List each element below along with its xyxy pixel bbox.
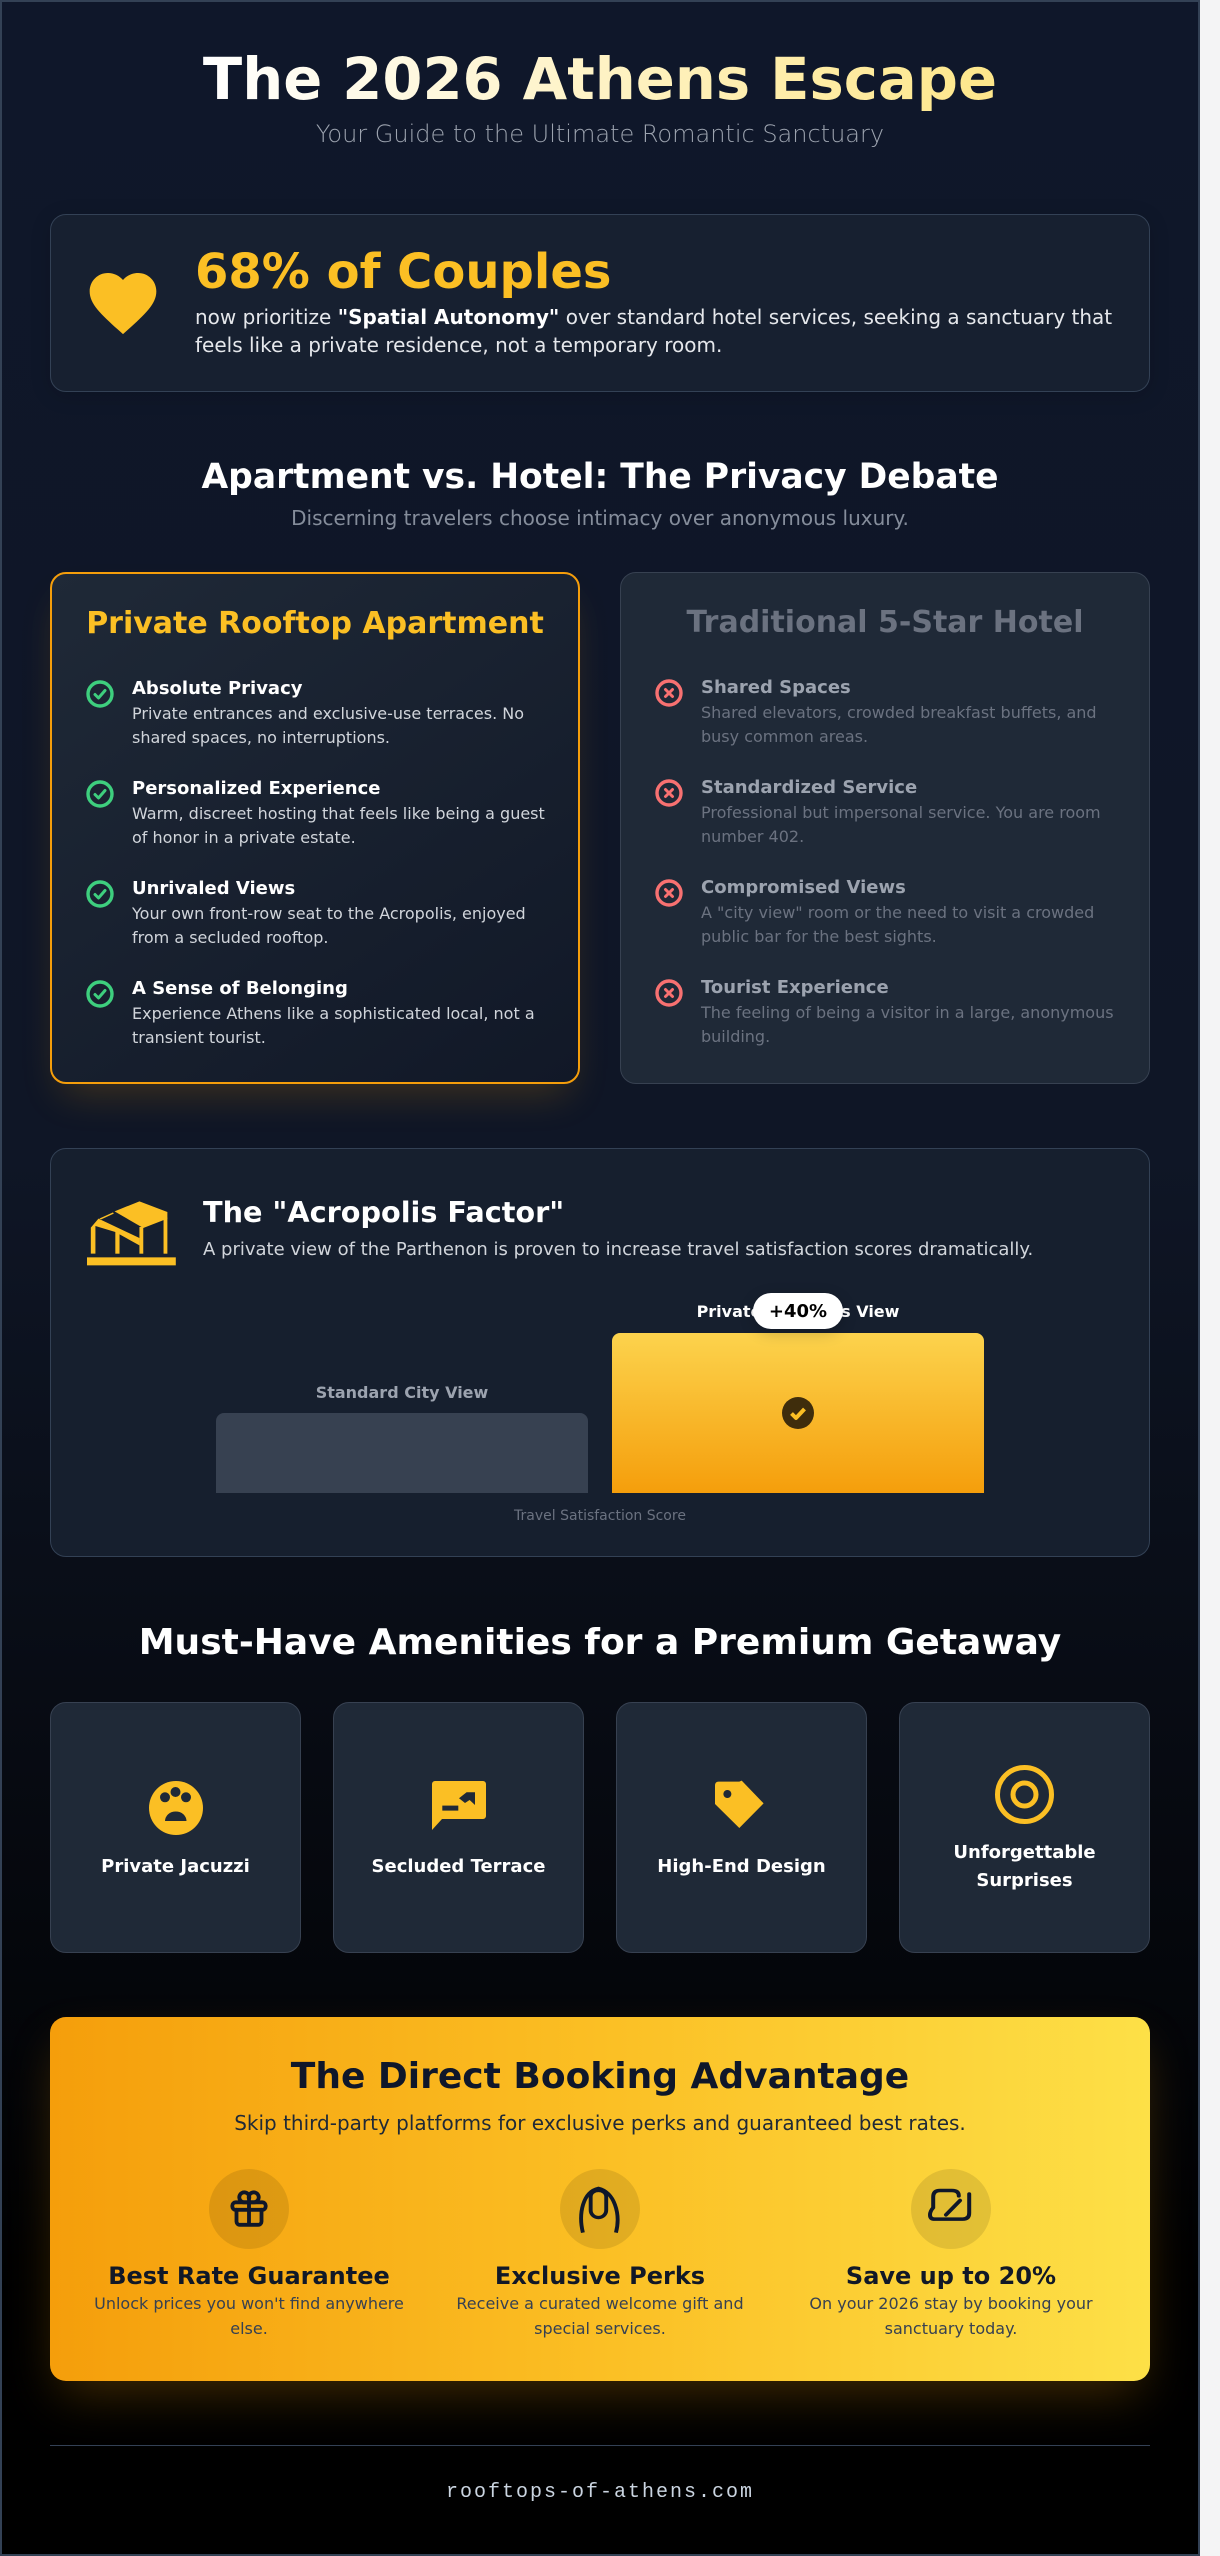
text — [809, 2294, 1093, 2338]
footer url: rooftops-of-athens.com — [446, 2480, 754, 2504]
item: tourist experience: building. — [701, 1027, 770, 1046]
item: compromised views: A "city view" room or the need to visit a crowded — [701, 903, 1094, 922]
item: compromised views: Compromised Views — [701, 877, 906, 898]
stat headline: 68% of Couples — [195, 244, 611, 300]
icon: edit square — [911, 2169, 991, 2249]
icon: jacuzzi — [149, 1781, 203, 1835]
callout: +40% — [753, 1293, 843, 1329]
item: absolute privacy — [86, 678, 524, 747]
item: personalized experience — [86, 778, 545, 847]
label: High-End Design — [657, 1856, 826, 1877]
icon: gift — [209, 2169, 289, 2249]
text: On your 2026 stay by booking your — [809, 2294, 1093, 2313]
chart description: A private view of the Parthenon is proven to increase travel satisfaction scores dramatically. — [203, 1239, 1033, 1260]
stat description: feels like a private residence, not a temporary room. — [195, 333, 722, 357]
item: standardized service: Professional but impersonal service. You are room — [701, 803, 1101, 822]
panel: 68% of couples stat — [50, 214, 1150, 392]
card: private jacuzzi — [50, 1702, 301, 1953]
item: absolute privacy: Private entrances and exclusive-use terraces. No — [132, 704, 524, 723]
text: else. — [230, 2318, 268, 2338]
panel heading: Traditional 5-Star Hotel — [686, 605, 1083, 640]
text — [94, 2294, 404, 2338]
icon: tag — [715, 1780, 764, 1828]
heading: Best Rate Guarantee — [108, 2262, 390, 2290]
label: Private Jacuzzi — [101, 1856, 250, 1877]
bar: standard city view — [216, 1413, 588, 1493]
chart title: The "Acropolis Factor" — [203, 1195, 564, 1229]
item: absolute privacy: Absolute Privacy — [132, 678, 302, 699]
stat description: now prioritize "Spatial Autonomy" over standard hotel services, seeking a sanctuary that — [195, 305, 1112, 329]
panel: the acropolis factor — [50, 1148, 1150, 1557]
heading: amenities: Must-Have Amenities for a Premium Getaway — [139, 1622, 1061, 1662]
title: The 2026 Athens Escape — [203, 46, 997, 113]
panel subtitle: Skip third-party platforms for exclusive perks and guaranteed best rates. — [234, 2111, 966, 2135]
text: sanctuary today. — [885, 2318, 1017, 2338]
callout: +40%: +40% — [769, 1301, 827, 1322]
card: high-end design — [616, 1702, 867, 1953]
column: save up to 20% — [809, 2169, 1093, 2338]
item: sense of belonging: transient tourist. — [132, 1028, 266, 1047]
column: best rate guarantee — [94, 2169, 404, 2338]
icon: perks — [560, 2169, 640, 2249]
text: Receive a curated welcome gift and — [456, 2294, 744, 2313]
item: unrivaled views: Your own front-row seat to the Acropolis, enjoyed — [132, 904, 526, 923]
item: shared spaces: Shared elevators, crowded breakfast buffets, and — [701, 703, 1097, 722]
column: exclusive perks — [456, 2169, 744, 2338]
item: standardized service: Standardized Service — [701, 777, 917, 798]
item: absolute privacy: shared spaces, no interruptions. — [132, 728, 390, 747]
label: Unforgettable — [953, 1842, 1096, 1863]
text: special services. — [534, 2318, 666, 2338]
subtitle: Your Guide to the Ultimate Romantic Sanctuary — [316, 120, 884, 148]
bar label: private: Private Acropolis View — [697, 1302, 899, 1321]
label: Surprises — [976, 1870, 1073, 1891]
item: unrivaled views: from a secluded rooftop. — [132, 928, 328, 947]
item: sense of belonging — [86, 978, 535, 1047]
bar label: standard: Standard City View — [316, 1383, 488, 1402]
section subtitle: Discerning travelers choose intimacy over anonymous luxury. — [291, 506, 909, 530]
item: shared spaces: Shared Spaces — [701, 677, 851, 698]
text: Unlock prices you won't find anywhere — [94, 2294, 404, 2313]
item: tourist experience: Tourist Experience — [701, 977, 889, 998]
panel: direct booking advantage — [50, 2017, 1150, 2381]
item: standardized service: number 402. — [701, 827, 804, 846]
footer — [50, 2445, 1150, 2505]
item: compromised views — [655, 877, 1094, 946]
item: unrivaled views — [86, 878, 526, 947]
header — [203, 46, 997, 148]
item: personalized experience: Warm, discreet hosting that feels like being a guest — [132, 804, 545, 823]
bar chart — [216, 1293, 984, 1524]
item: sense of belonging: A Sense of Belonging — [132, 978, 348, 999]
panel heading: Private Rooftop Apartment — [86, 606, 544, 641]
item: standardized service — [655, 777, 1101, 846]
item: compromised views: public bar for the best sights. — [701, 927, 937, 946]
label: Secluded Terrace — [372, 1856, 545, 1877]
icon: heart — [90, 273, 156, 334]
item: shared spaces — [655, 677, 1097, 746]
item: unrivaled views: Unrivaled Views — [132, 878, 295, 899]
card: secluded terrace — [333, 1702, 584, 1953]
section title: Apartment vs. Hotel: The Privacy Debate — [201, 456, 999, 496]
heading: privacy debate — [201, 456, 999, 530]
item: personalized experience: Personalized Experience — [132, 778, 380, 799]
item: sense of belonging: Experience Athens like a sophisticated local, not a — [132, 1004, 535, 1023]
panel: private rooftop apartment — [50, 572, 580, 1084]
card: unforgettable surprises — [899, 1702, 1150, 1953]
icon: check badge — [782, 1397, 814, 1429]
stat description — [195, 305, 1112, 357]
text — [456, 2294, 744, 2338]
item: tourist experience — [655, 977, 1114, 1046]
label — [953, 1842, 1096, 1891]
panel heading: The Direct Booking Advantage — [291, 2056, 909, 2096]
item: tourist experience: The feeling of being a visitor in a large, anonymous — [701, 1003, 1114, 1022]
bar: private acropolis view — [612, 1333, 984, 1493]
axis label: Travel Satisfaction Score — [514, 1508, 686, 1524]
heading: Exclusive Perks — [495, 2262, 705, 2290]
item: shared spaces: busy common areas. — [701, 727, 868, 746]
icon: terrace — [432, 1781, 486, 1830]
icon: target — [995, 1765, 1054, 1824]
heading: Save up to 20% — [846, 2262, 1056, 2290]
panel: traditional 5-star hotel — [620, 572, 1150, 1084]
item: personalized experience: of honor in a private estate. — [132, 828, 356, 847]
icon: parthenon — [87, 1201, 176, 1266]
